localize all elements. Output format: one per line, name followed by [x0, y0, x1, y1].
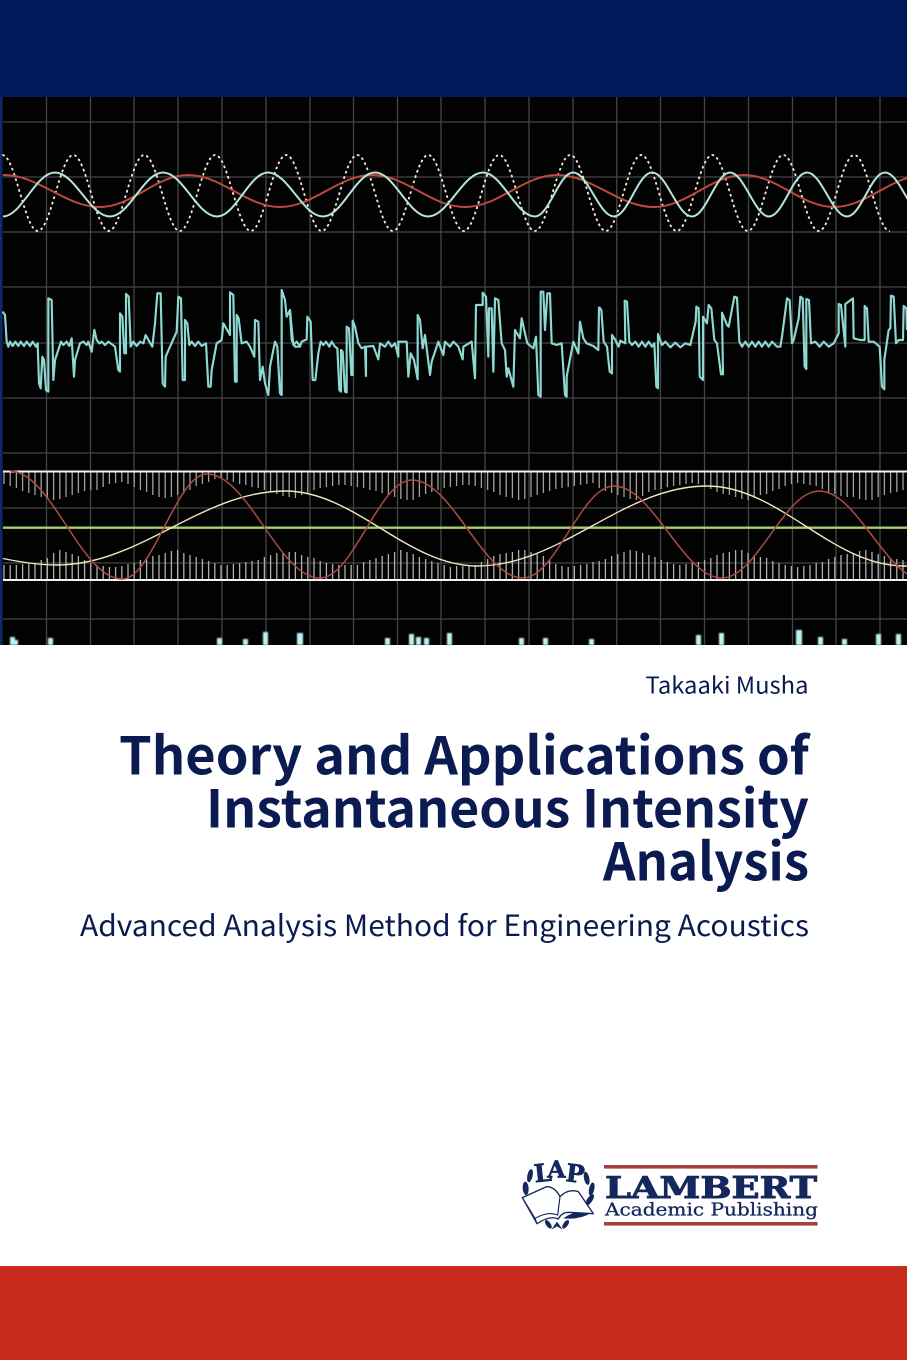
logo rule bottom	[604, 1222, 818, 1226]
logo wordmark: LAMBERT	[605, 1171, 818, 1206]
author: Takaaki Musha	[646, 666, 808, 700]
bottom red band	[0, 1266, 907, 1360]
title: Instantaneous Intensity	[206, 768, 809, 842]
emblem: open book with laurels: A	[546, 1156, 566, 1184]
logo tagline: Academic Publishing	[604, 1200, 818, 1220]
emblem: open book with laurels	[522, 1156, 596, 1230]
cream envelope curve	[3, 486, 907, 566]
title	[119, 714, 812, 896]
cyan spectrum blips	[10, 630, 901, 645]
publisher logo	[522, 1156, 818, 1230]
title: Theory and Applications of	[119, 714, 812, 790]
white frame rails	[3, 472, 907, 580]
logo rule top	[604, 1165, 818, 1169]
green centre line	[3, 527, 907, 529]
oscilloscope panel	[0, 97, 907, 645]
dotted sine wave	[2, 155, 890, 231]
bar code ticks: bottom	[4, 550, 903, 580]
top navy band	[0, 0, 907, 97]
emblem: open book with laurels: P	[564, 1158, 586, 1189]
title: Analysis	[602, 820, 809, 896]
subtitle: Advanced Analysis Method for Engineering Acoustics	[80, 903, 809, 945]
pulse signal trace	[3, 290, 907, 397]
red sine wave	[3, 175, 907, 207]
emblem: open book with laurels: L	[533, 1158, 553, 1188]
teal sine wave	[3, 172, 907, 216]
brown carrier curve	[10, 471, 907, 580]
bar code ticks: top	[4, 472, 903, 500]
